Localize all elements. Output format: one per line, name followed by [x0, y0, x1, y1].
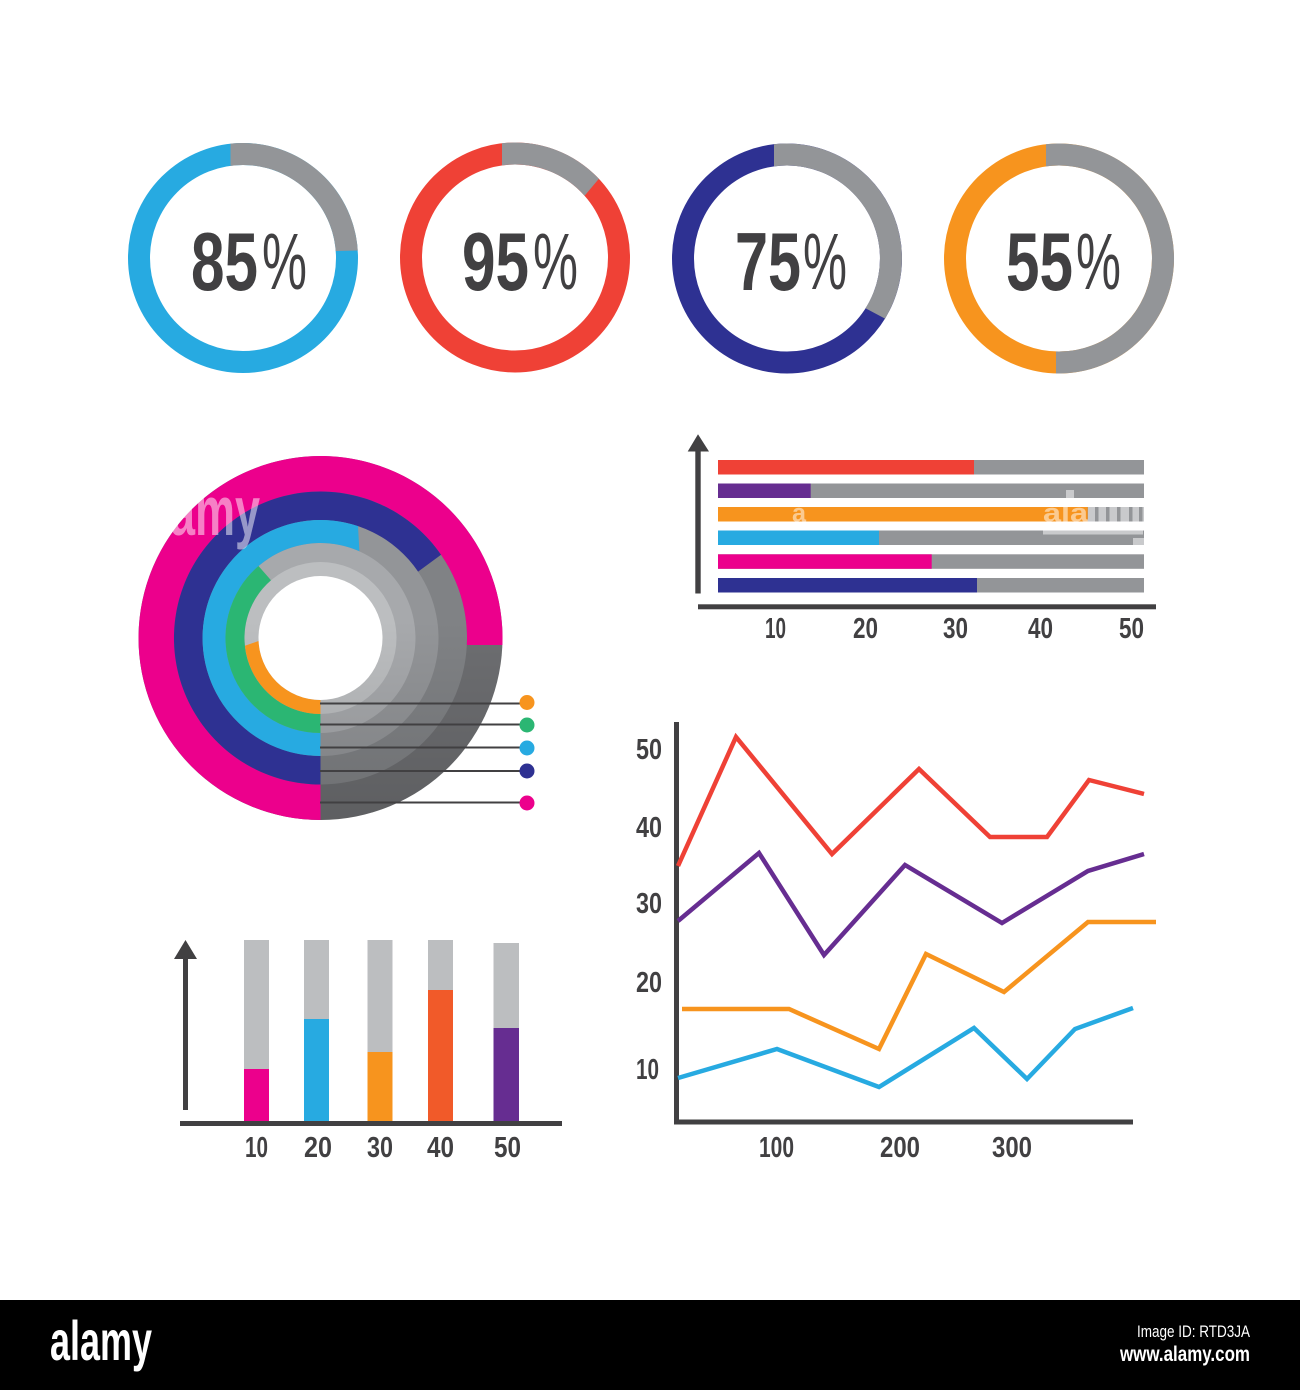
watermark on bars	[792, 490, 1144, 545]
x axis labels: 30	[367, 1132, 393, 1164]
ring: 55%: 55	[1006, 215, 1073, 308]
leader line and dot: blue	[320, 740, 534, 756]
footer logo: alamy	[50, 1309, 152, 1372]
leader line and dot: pink	[320, 796, 534, 810]
x axis labels: 20	[304, 1132, 332, 1164]
ring: 75%: %	[803, 217, 847, 306]
chart: horizontal stacked bars	[688, 434, 1156, 645]
x axis labels: 50	[494, 1132, 521, 1164]
arc: navy	[174, 492, 441, 784]
bar: blue	[718, 530, 1144, 545]
x axis labels: 40	[427, 1132, 454, 1164]
y axis labels: 10	[636, 1054, 659, 1086]
column: pink	[244, 940, 269, 1121]
ring: 95%	[411, 142, 619, 362]
ring: 55%: %	[1076, 217, 1121, 306]
arc: orange	[245, 641, 320, 714]
line: orange	[682, 922, 1156, 1049]
ring: 75%: 75	[735, 215, 801, 308]
watermark on bars: a	[792, 498, 807, 528]
x axis labels: 10	[765, 613, 786, 645]
website: www.alamy.com	[1119, 1343, 1250, 1366]
y axis labels: 50	[636, 734, 662, 766]
x axis labels: 200	[880, 1132, 920, 1164]
y axis arrow	[688, 434, 709, 594]
y axis labels: 30	[636, 888, 662, 920]
x axis labels	[759, 1132, 1032, 1164]
x axis labels: 50	[1119, 613, 1144, 645]
arc: pink	[139, 456, 503, 820]
ring: 85%: %	[262, 217, 307, 306]
arc: blue	[203, 520, 359, 756]
leader line and dot: orange	[320, 695, 534, 710]
bar: red	[718, 460, 1144, 474]
x axis labels: 300	[992, 1132, 1032, 1164]
bar: orange	[718, 507, 1144, 522]
bar: purple	[718, 484, 1144, 498]
x axis labels: 100	[759, 1132, 794, 1164]
x axis labels: 30	[943, 613, 968, 645]
leader line and dot: green	[320, 718, 534, 732]
footer bar	[0, 1300, 1300, 1390]
watermark on donut: amy	[170, 472, 260, 550]
ring: 75%	[683, 144, 902, 362]
x axis labels: 10	[245, 1132, 268, 1164]
ring: 55%	[955, 143, 1174, 373]
x axis labels: 40	[1028, 613, 1053, 645]
y axis labels: 40	[636, 812, 662, 844]
image id: Image ID: RTD3JA	[1137, 1322, 1251, 1341]
column: purple	[494, 943, 519, 1121]
x axis labels	[245, 1132, 521, 1164]
line: blue	[678, 1008, 1133, 1087]
x axis labels	[765, 613, 1144, 645]
line: purple	[678, 853, 1144, 955]
watermark on bars: ala	[1043, 498, 1089, 528]
chart: line chart	[636, 722, 1156, 1164]
x axis labels: 20	[853, 613, 878, 645]
centre hole	[258, 576, 382, 700]
leader line and dot: navy	[320, 764, 534, 778]
y axis labels	[636, 734, 662, 1086]
column: orange	[368, 940, 392, 1121]
arc: green	[225, 566, 320, 733]
ring: 85%	[139, 143, 358, 362]
ring: 95%: %	[533, 217, 578, 306]
line: red	[678, 737, 1144, 866]
grey background rings	[138, 456, 502, 820]
bar: navy	[718, 578, 1144, 592]
x axis	[180, 1121, 562, 1126]
ring: 85%: 85	[191, 215, 258, 308]
y axis arrow	[174, 940, 197, 1110]
column: red-orange	[428, 940, 453, 1121]
panel: progress rings row	[139, 142, 1174, 373]
y axis labels: 20	[636, 967, 662, 999]
ring: 95%: 95	[462, 215, 529, 308]
bar: pink	[718, 554, 1144, 569]
chart: vertical stacked bars	[174, 940, 562, 1164]
chart: concentric radial donut	[138, 456, 534, 820]
column: blue	[304, 940, 329, 1121]
x axis	[698, 604, 1156, 609]
axes	[676, 722, 1133, 1122]
